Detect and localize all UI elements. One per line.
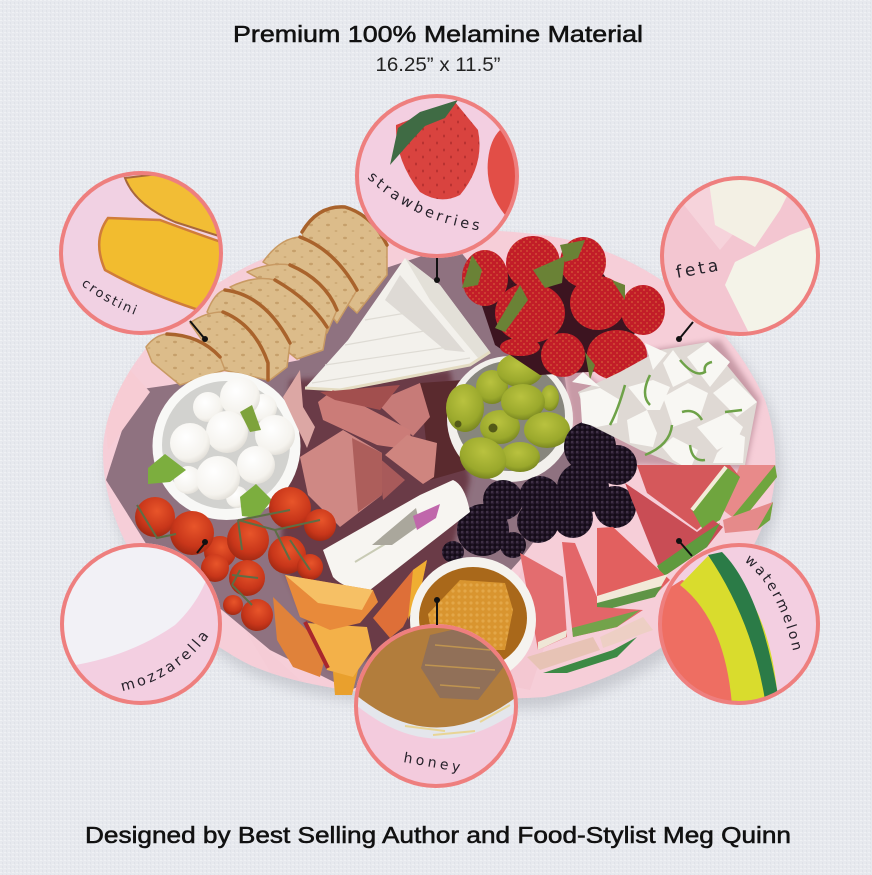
plate bbox=[103, 230, 776, 699]
tomatoes on the vine bbox=[135, 487, 336, 631]
watermelon slices bbox=[520, 465, 777, 673]
callout: crostini bbox=[59, 171, 223, 335]
label: watermelon: watermelon bbox=[746, 556, 800, 650]
crostini illustration bbox=[98, 175, 219, 310]
callout: strawberries bbox=[355, 94, 519, 258]
leader: mozzarella bbox=[197, 539, 208, 553]
olive bowl bbox=[446, 353, 573, 486]
label: mozzarella: mozzarella bbox=[121, 633, 208, 691]
label: crostini: crostini bbox=[82, 280, 137, 314]
callout: honey bbox=[350, 620, 525, 788]
dimensions subtitle: 16.25” x 11.5” bbox=[376, 55, 500, 76]
leader: feta bbox=[676, 322, 693, 342]
leader: honey bbox=[434, 597, 440, 625]
brie wedge bbox=[305, 258, 490, 390]
footer caption: Designed by Best Selling Author and Food-Stylist Meg Quinn bbox=[85, 822, 791, 848]
leader: strawberries bbox=[434, 258, 440, 283]
label: feta: feta bbox=[674, 255, 723, 283]
strawberries bbox=[462, 236, 665, 380]
blackberries bbox=[442, 421, 637, 563]
mozzarella bowl bbox=[148, 372, 300, 520]
lavender goat cheese bbox=[323, 480, 470, 590]
title: Premium 100% Melamine Material bbox=[233, 21, 643, 47]
bread crust edges bbox=[167, 207, 387, 380]
honey illustration bbox=[358, 628, 514, 739]
strawberry illustration bbox=[390, 100, 520, 215]
leader: watermelon bbox=[676, 538, 692, 556]
callout: feta bbox=[660, 176, 820, 336]
feta illustration bbox=[684, 180, 816, 332]
honey bowl bbox=[410, 557, 536, 683]
leader: crostini bbox=[190, 321, 208, 342]
plate shadow bbox=[108, 240, 781, 709]
mozzarella illustration bbox=[64, 547, 206, 665]
label: honey: honey bbox=[402, 750, 465, 776]
prosciutto bbox=[283, 370, 437, 527]
callout: mozzarella bbox=[60, 543, 222, 705]
callout: watermelon bbox=[658, 543, 820, 705]
watermelon illustration bbox=[662, 552, 778, 701]
crostini bread slices bbox=[146, 207, 387, 385]
feta cubes bbox=[572, 342, 757, 470]
label: strawberries: strawberries bbox=[368, 174, 479, 230]
peach slices bbox=[273, 560, 427, 695]
